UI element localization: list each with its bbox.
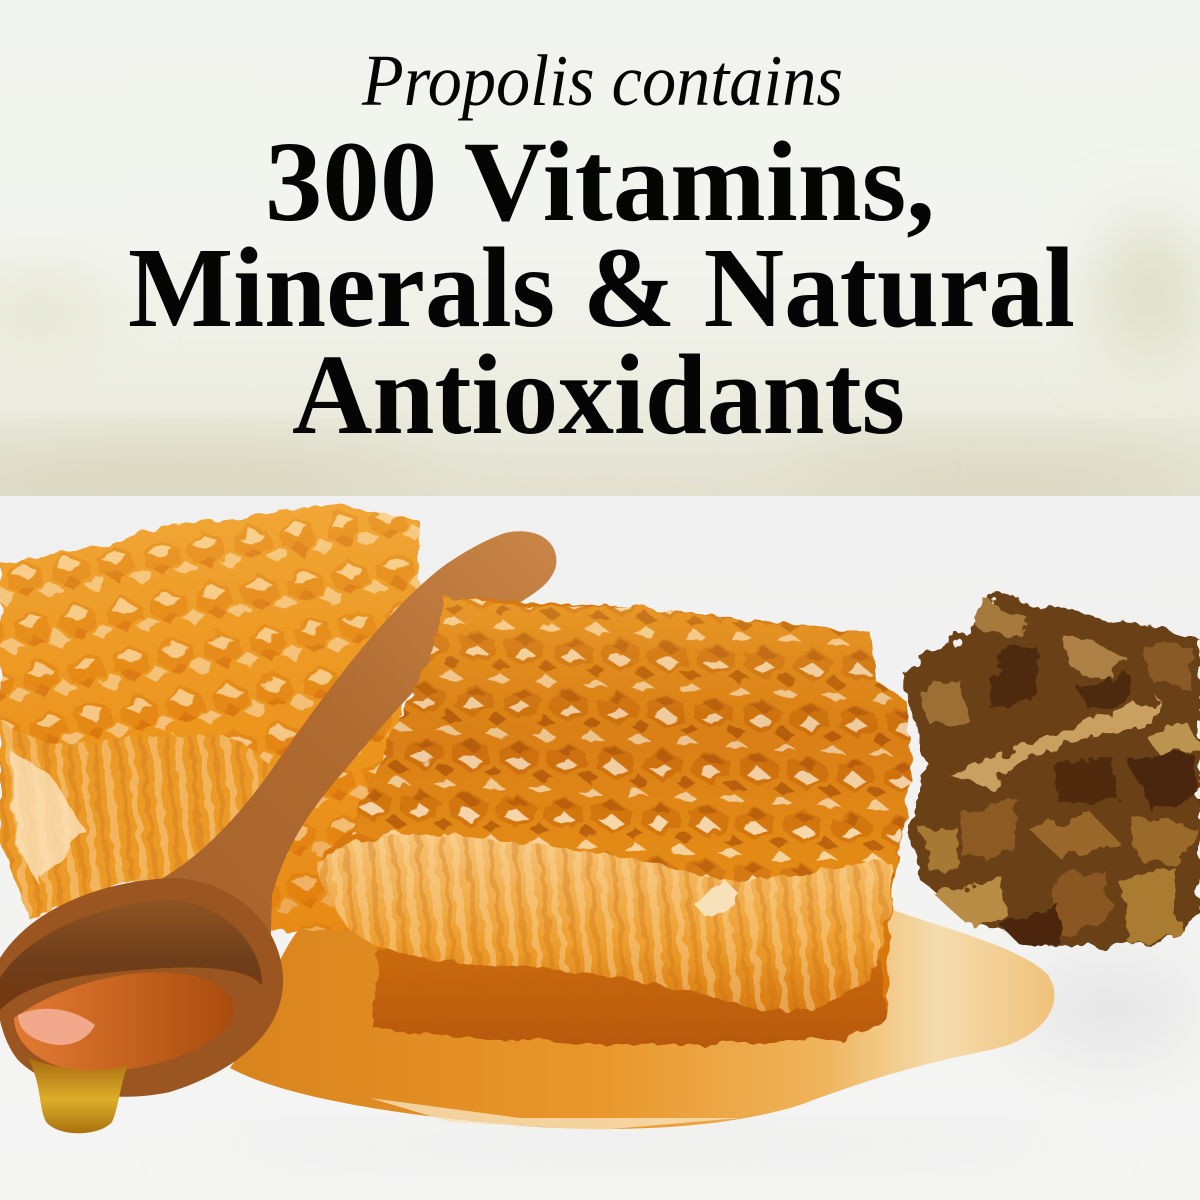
image: propolis pile [900, 595, 1200, 950]
title line: 300 Vitamins,: 300 Vitamins, [265, 118, 935, 245]
spoon handle [150, 531, 556, 960]
comb side wall [316, 834, 891, 1011]
honey drip [28, 1058, 128, 1133]
background: blurred header panel [0, 0, 1200, 515]
honey in spoon [14, 972, 234, 1072]
image: wooden spoon [0, 531, 556, 1133]
wax highlight [695, 880, 740, 916]
comb bottom layer [375, 950, 888, 1045]
propolis flakes [918, 600, 1200, 945]
background: white table surface [0, 496, 1200, 1200]
comb top cells [352, 597, 912, 890]
image: front honeycomb [316, 597, 912, 1045]
image: back honeycomb [0, 503, 420, 930]
spoon bowl [0, 878, 283, 1097]
image: honey puddle [230, 900, 1055, 1130]
title line: Minerals & Natural: Minerals & Natural [128, 224, 1075, 351]
propolis base [900, 595, 1200, 950]
title line: Antioxidants: Antioxidants [292, 331, 905, 458]
title line: Propolis contains: Propolis contains [361, 40, 843, 121]
comb backing [316, 597, 912, 1045]
title [128, 40, 1075, 458]
